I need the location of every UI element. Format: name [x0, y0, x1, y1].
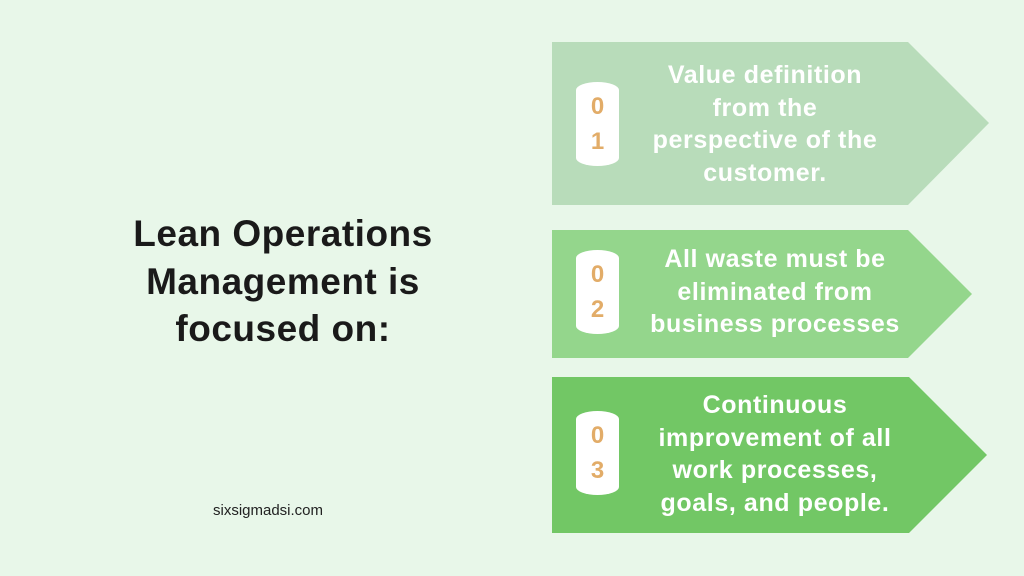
text 1: Value definition	[668, 61, 862, 89]
badge 2	[576, 250, 619, 334]
title	[133, 213, 433, 349]
badge 2: 2	[591, 296, 604, 323]
panel 3	[576, 391, 892, 516]
text 1	[653, 61, 877, 186]
badge 1	[576, 82, 619, 166]
source text: sixsigmadsi.com	[213, 502, 323, 519]
title: Lean Operations	[133, 213, 433, 254]
text 3: improvement of all	[658, 424, 892, 452]
text 2: eliminated from	[677, 278, 873, 306]
badge 3: 0	[591, 422, 604, 449]
title: focused on:	[175, 308, 391, 349]
panel 2	[576, 245, 900, 338]
text 3: goals, and people.	[661, 488, 889, 516]
title: Management is	[146, 260, 420, 302]
badge 3	[576, 411, 619, 495]
text 2: All waste must be	[664, 245, 886, 273]
text 3: work processes,	[673, 456, 877, 484]
badge 3: 3	[591, 457, 604, 484]
panel 1	[576, 61, 877, 186]
text 1: from the	[713, 94, 817, 122]
text 2: business processes	[650, 310, 900, 338]
text 2	[650, 245, 900, 338]
text 1: customer.	[703, 158, 827, 186]
badge 1: 1	[591, 128, 604, 155]
badge 2: 0	[591, 261, 604, 288]
text 1: perspective of the	[653, 126, 877, 154]
badge 1: 0	[591, 93, 604, 120]
text 3: Continuous	[703, 391, 847, 419]
text 3	[658, 391, 892, 516]
